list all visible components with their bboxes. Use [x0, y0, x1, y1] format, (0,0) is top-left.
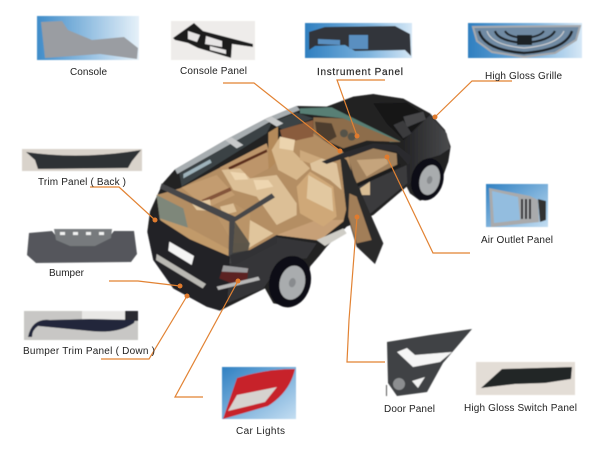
part: trim panel back — [22, 149, 142, 171]
part: instrument panel — [305, 23, 412, 58]
label: instrument panel: Instrument Panel — [317, 67, 403, 78]
license plate — [168, 242, 194, 265]
part: car lights — [222, 367, 296, 419]
roof rails and side windows — [175, 106, 300, 174]
windshield — [300, 107, 401, 142]
part: bumper — [27, 229, 137, 263]
rear wheel — [263, 251, 317, 312]
part: high gloss switch panel — [476, 362, 575, 395]
part: air outlet panel — [486, 184, 548, 227]
callout dots — [152, 114, 438, 298]
leader lines — [90, 80, 512, 397]
label: console panel: Console Panel — [180, 66, 247, 77]
rear bumper strip — [156, 254, 206, 288]
trunk — [157, 195, 190, 237]
rear frame — [160, 183, 275, 263]
seats — [222, 168, 297, 225]
sill plate — [317, 228, 347, 246]
label: air outlet panel: Air Outlet Panel — [481, 235, 553, 246]
part: console — [37, 16, 139, 60]
label: high gloss grille: High Gloss Grille — [485, 71, 562, 82]
label: console: Console — [70, 67, 107, 78]
label: high gloss switch panel: High Gloss Switch Panel — [464, 403, 577, 414]
label: car lights: Car Lights — [236, 426, 285, 437]
label: trim panel back: Trim Panel ( Back ) — [38, 177, 126, 188]
car body — [147, 94, 451, 311]
dashboard — [313, 117, 401, 148]
front wheel — [406, 155, 448, 204]
label: bumper: Bumper — [49, 268, 85, 279]
part: bumper trim panel down — [24, 311, 138, 340]
pillar and wood panels — [268, 127, 278, 170]
front door window — [348, 148, 397, 186]
part: console panel — [171, 21, 255, 60]
open door — [340, 155, 383, 264]
tail lamp — [219, 266, 248, 284]
part: high gloss grille — [468, 23, 582, 58]
A-pillar door frame — [322, 143, 412, 165]
part: door panel — [386, 329, 472, 396]
interior base — [157, 133, 353, 253]
body above trunk sill — [147, 213, 230, 311]
label: door panel: Door Panel — [384, 404, 435, 415]
illustration: cutaway car — [147, 94, 451, 312]
label: bumper trim panel down: Bumper Trim Panel ( Down ) — [23, 346, 155, 357]
